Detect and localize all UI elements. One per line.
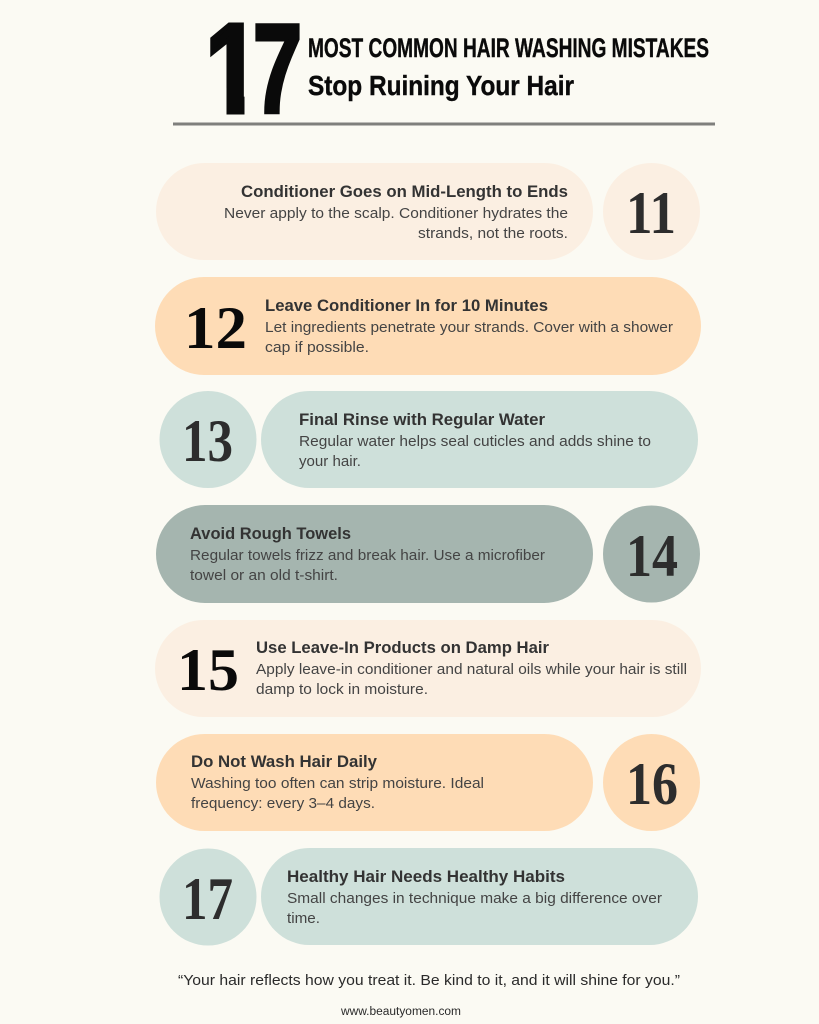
panel: item 16: 16 (626, 751, 678, 817)
panel: item 14: Regular towels frizz and break hair. Use a microfiber (190, 548, 545, 564)
panel: item 11: Never apply to the scalp. Conditioner hydrates the (224, 206, 568, 222)
panel: item 16 (156, 734, 700, 831)
panel: item 17: 17 (182, 866, 233, 932)
panel: item 17: Healthy Hair Needs Healthy Habits (287, 868, 565, 886)
website: www.beautyomen.com (340, 1006, 461, 1018)
panel: item 13: Final Rinse with Regular Water (299, 411, 546, 429)
panel: item 14: 14 (626, 523, 678, 589)
panel: item 17 (160, 848, 698, 946)
panel: item 15: Apply leave-in conditioner and natural oils while your hair is still (256, 662, 687, 678)
panel: item 12 (155, 277, 701, 375)
panel: item 11: 11 (626, 180, 676, 246)
panel: item 12: Let ingredients penetrate your strands. Cover with a shower (265, 320, 673, 336)
header (173, 0, 715, 140)
big number 17: 7 (253, 0, 302, 140)
panel: item 15 (155, 620, 701, 717)
panel: item 11: Conditioner Goes on Mid-Length to Ends (241, 183, 568, 201)
subtitle: Stop Ruining Your Hair (308, 70, 574, 101)
panel: item 11 (156, 163, 700, 260)
big number 17: 1 (206, 0, 260, 139)
panel: item 13: your hair. (299, 454, 361, 470)
panel: item 11: strands, not the roots. (418, 226, 568, 242)
panel: item 14: Avoid Rough Towels (190, 525, 351, 543)
panel: item 13: 13 (182, 408, 233, 474)
panel: item 12: cap if possible. (265, 340, 369, 356)
panel: item 12: Leave Conditioner In for 10 Minutes (265, 297, 548, 315)
panel: item 15: 15 (177, 637, 239, 703)
panel: item 17: Small changes in technique make a big difference over (287, 891, 662, 907)
quote: “Your hair reflects how you treat it. Be kind to it, and it will shine for you.” (178, 972, 680, 989)
panel: item 12: 12 (184, 295, 247, 361)
panel: item 17: time. (287, 911, 320, 927)
panel: item 13: Regular water helps seal cuticles and adds shine to (299, 434, 651, 450)
panel: item 15: Use Leave-In Products on Damp Hair (256, 639, 550, 657)
panel: item 16: frequency: every 3–4 days. (191, 796, 375, 812)
panel: item 13 (160, 391, 698, 488)
panel: item 16: Do Not Wash Hair Daily (191, 753, 378, 771)
panel: item 16: Washing too often can strip moisture. Ideal (191, 776, 484, 792)
panel: item 14 (156, 505, 700, 603)
big number 17 (200, 0, 302, 140)
panel: item 14: towel or an old t-shirt. (190, 568, 338, 584)
panel: item 15: damp to lock in moisture. (256, 682, 428, 698)
